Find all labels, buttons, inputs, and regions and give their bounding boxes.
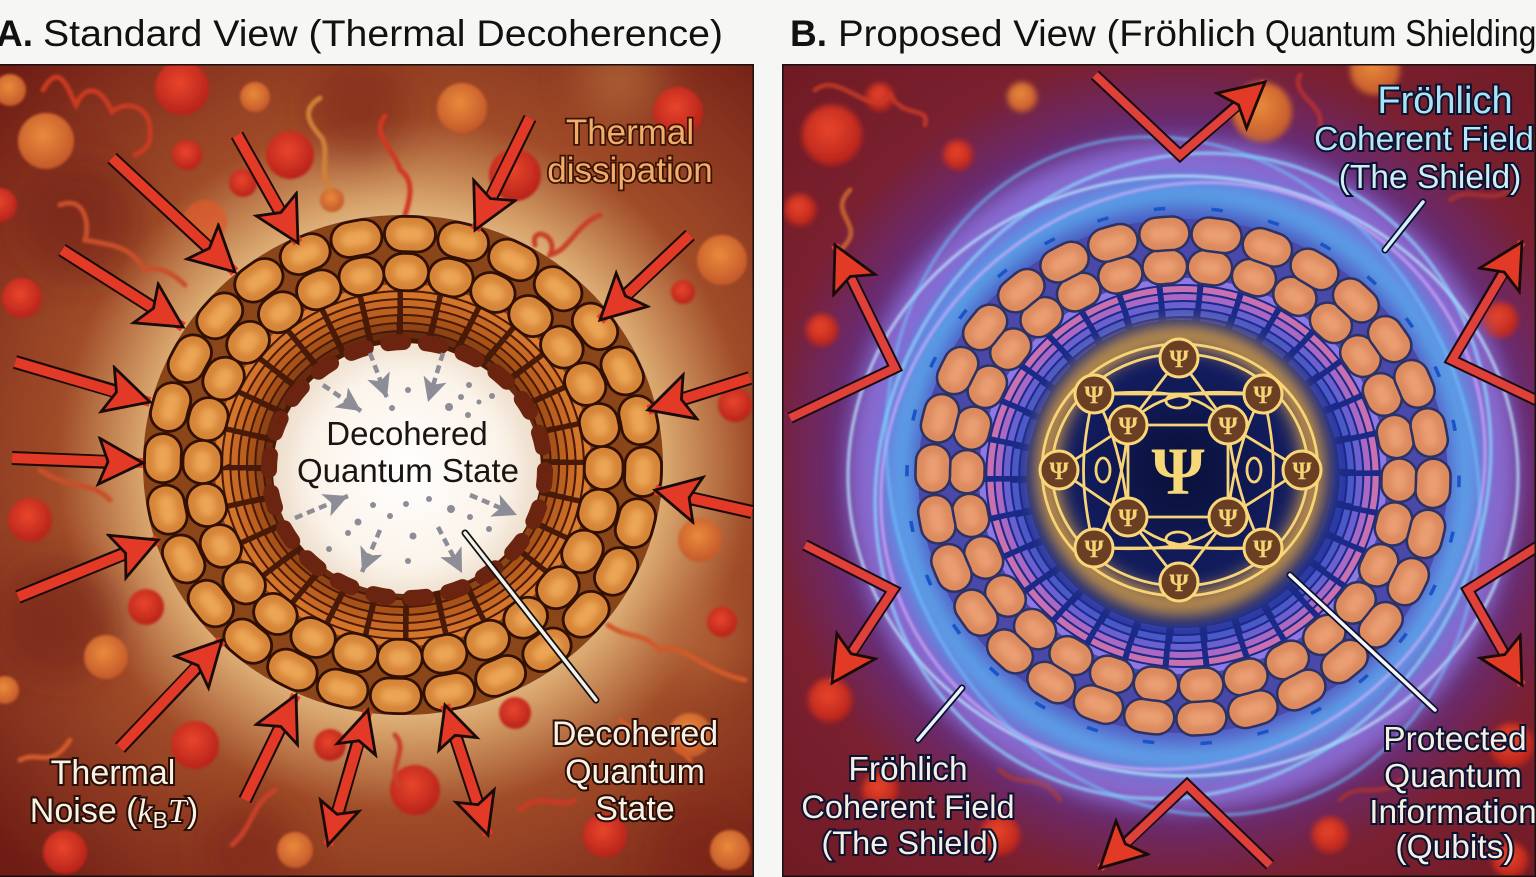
network lines [1042, 344, 1318, 596]
label: frohlich shield top [1314, 80, 1534, 196]
label: frohlich shield bottom: (The Shield) [821, 825, 999, 861]
label: thermal dissipation: dissipation [547, 151, 713, 190]
label: frohlich shield top: Coherent Field [1314, 121, 1534, 158]
protected lumen [1028, 320, 1332, 624]
qubit nodes: Ψ [1292, 458, 1312, 485]
core glow [1046, 336, 1314, 604]
label: frohlich shield bottom: Coherent Field [801, 789, 1015, 825]
label: frohlich shield top: Fröhlich [1377, 80, 1513, 122]
label: thermal noise kBT: ) [187, 792, 198, 830]
label: thermal noise kBT [30, 754, 198, 833]
scattered quantum dots [326, 382, 495, 564]
decohered lumen [269, 342, 545, 598]
central psi symbol: Ψ [1151, 433, 1205, 509]
scattering grey dashed arrows [295, 353, 517, 573]
shield: coherent field glow [836, 130, 1531, 824]
qubit nodes [1040, 339, 1321, 601]
label: protected quantum information: Quantum [1384, 758, 1522, 795]
background: blurred thermal particles [784, 45, 1534, 877]
label: protected quantum information: Information [1369, 794, 1536, 831]
text: decohered quantum state: Decohered [326, 415, 488, 452]
background: mottled dark patches [0, 40, 750, 877]
microtubule ring cross-section [163, 234, 643, 696]
qubit nodes: Ψ [1218, 505, 1238, 532]
microtubule ring shielded [907, 208, 1459, 744]
title: panel B heading: B. [790, 13, 827, 54]
qubit nodes: Ψ [1169, 346, 1189, 373]
title: panel B heading: Proposed View (Fröhlich [838, 13, 1256, 54]
deflected thermal arrows [790, 75, 1536, 868]
background: thermal squiggles [20, 77, 745, 845]
quantum qubit network core [1040, 336, 1321, 604]
qubit nodes: Ψ [1118, 413, 1138, 440]
rib stacks [218, 287, 588, 643]
label: thermal dissipation [547, 113, 713, 190]
qubit nodes: Ψ [1218, 413, 1238, 440]
leader line: bottom shield [918, 688, 962, 740]
label: thermal dissipation: Thermal [566, 113, 694, 152]
leader line: top shield [1385, 202, 1423, 250]
label: decohered quantum state callout: Quantum [565, 753, 705, 791]
title: panel B heading [790, 13, 1536, 54]
label: frohlich shield top: (The Shield) [1339, 159, 1521, 196]
qubit nodes: Ψ [1084, 536, 1104, 563]
label: protected quantum information [1369, 721, 1536, 866]
label: frohlich shield bottom [801, 751, 1015, 861]
label: protected quantum information: Protected [1383, 721, 1527, 758]
label: thermal noise kBT: B [153, 807, 168, 833]
coherence ticks [907, 208, 1459, 744]
panel: proposed view frohlich quantum shielding [758, 40, 1536, 877]
leader line: protected information [1290, 575, 1435, 710]
label: decohered quantum state callout: Decohered [552, 715, 718, 753]
inner row of lobes [202, 272, 604, 658]
text: decohered quantum state: Quantum State [297, 452, 519, 489]
label: frohlich shield bottom: Fröhlich [848, 751, 968, 788]
inner row of lobes [967, 266, 1399, 686]
qubit nodes: Ψ [1253, 536, 1273, 563]
thermal noise arrows [12, 118, 752, 845]
outer row of lobes [933, 233, 1433, 719]
panel: standard view thermal decoherence [0, 40, 754, 877]
label: thermal noise kBT: T [168, 793, 189, 830]
label: decohered quantum state callout: State [595, 790, 675, 828]
leader line: decohered state [465, 533, 596, 700]
qubit nodes: Ψ [1118, 505, 1138, 532]
background: blurred squiggles [815, 75, 1510, 800]
label: decohered quantum state callout [552, 715, 718, 828]
qubit nodes: Ψ [1253, 382, 1273, 409]
rib stacks [982, 281, 1384, 671]
label: thermal noise kBT: Thermal [51, 754, 175, 792]
title: panel A heading: Standard View (Thermal Decoherence) [43, 13, 723, 54]
text: decohered quantum state [298, 421, 518, 488]
qubit nodes: Ψ [1049, 458, 1069, 485]
background: thermal particles [0, 61, 752, 874]
qubit nodes: Ψ [1169, 570, 1189, 597]
qubit nodes: Ψ [1084, 382, 1104, 409]
label: thermal noise kBT: Noise (k [30, 792, 153, 830]
label: protected quantum information: (Qubits) [1395, 829, 1515, 866]
outer row of lobes [163, 234, 643, 696]
